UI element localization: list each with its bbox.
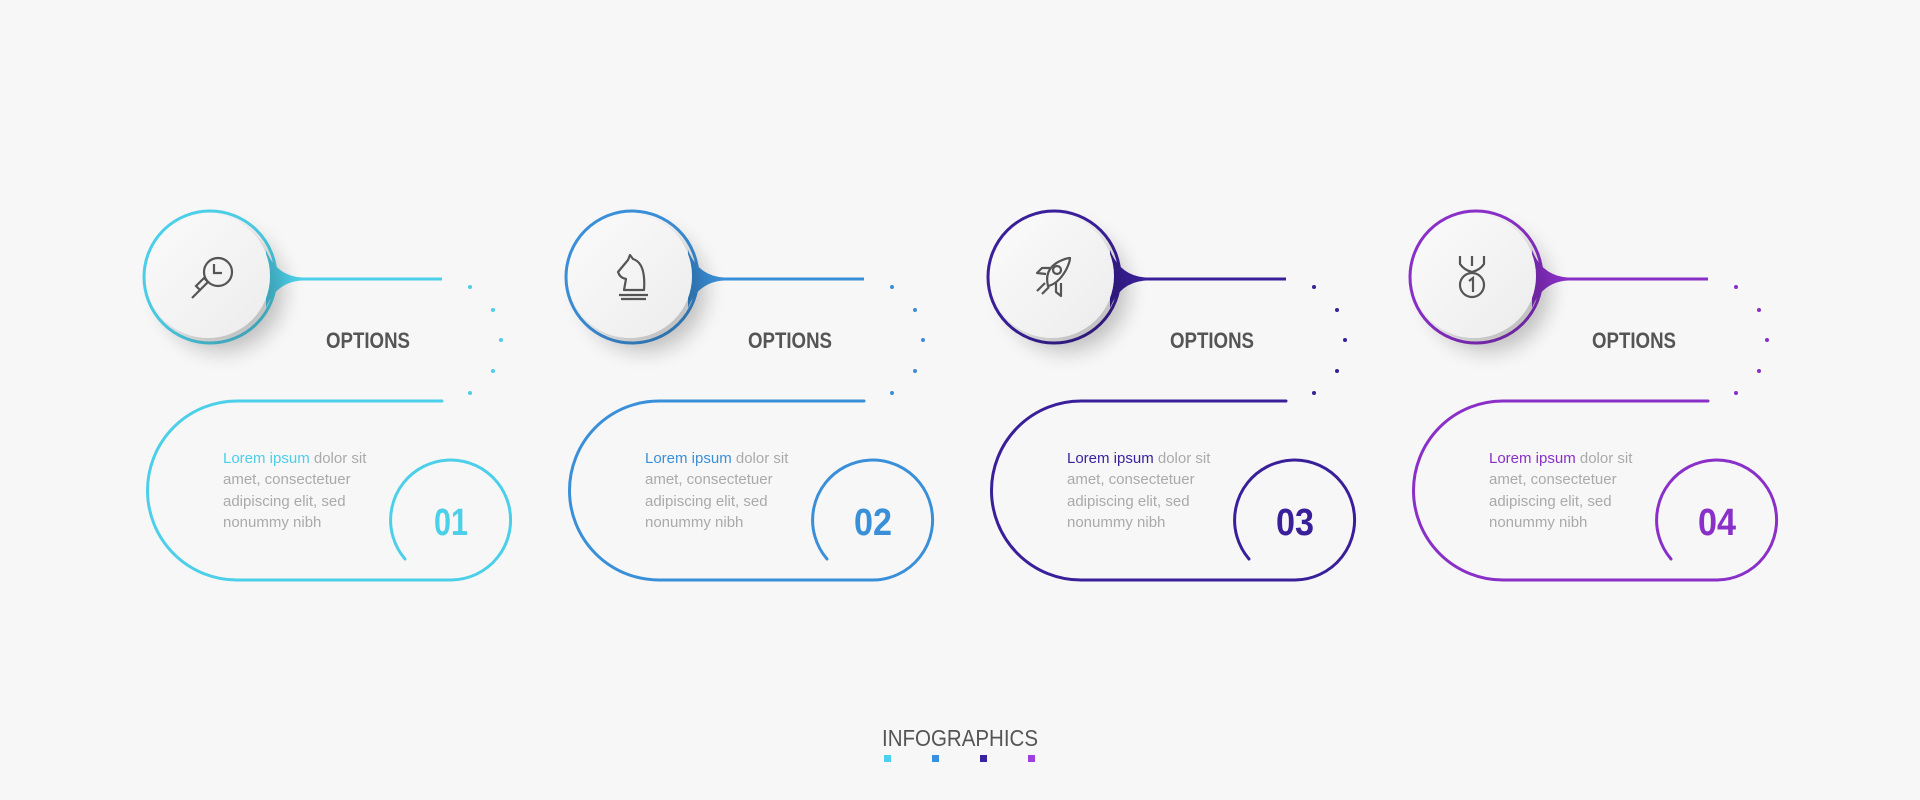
body text: adipiscing elit, sed [1067, 493, 1190, 510]
body text: amet, consectetuer [1489, 471, 1617, 488]
body text: nonummy nibh [645, 514, 743, 531]
number: 02 [854, 502, 892, 544]
body text: Lorem ipsum dolor sit [223, 450, 366, 467]
panel: step 03 [988, 211, 1355, 580]
legend squares [884, 755, 1035, 762]
icon: rocket [1037, 258, 1070, 296]
body text: nonummy nibh [223, 514, 321, 531]
dotted arc [1734, 285, 1769, 395]
icon: medal [1460, 256, 1484, 297]
panel: step 01 [144, 211, 511, 580]
body text: Lorem ipsum dolor sit [1067, 450, 1210, 467]
dotted arc [1312, 285, 1347, 395]
ring with connector [144, 211, 442, 343]
panel: step 02 [566, 211, 933, 580]
body text: Lorem ipsum dolor sit [1489, 450, 1632, 467]
number: 04 [1698, 502, 1736, 544]
body text: amet, consectetuer [1067, 471, 1195, 488]
panel: step 04 [1410, 211, 1777, 580]
footer title: INFOGRAPHICS [882, 725, 1038, 751]
white disc [1412, 214, 1536, 338]
body text: adipiscing elit, sed [645, 493, 768, 510]
heading: OPTIONS [326, 328, 410, 353]
heading: OPTIONS [1170, 328, 1254, 353]
number: 03 [1276, 502, 1314, 544]
capsule outline [570, 401, 933, 580]
body text: Lorem ipsum dolor sit [645, 450, 788, 467]
body text: nonummy nibh [1067, 514, 1165, 531]
icon: magnifier clock [192, 258, 232, 298]
body text: adipiscing elit, sed [223, 493, 346, 510]
number: 01 [434, 502, 468, 544]
dotted arc [890, 285, 925, 395]
white disc [146, 214, 270, 338]
heading: OPTIONS [1592, 328, 1676, 353]
body text: adipiscing elit, sed [1489, 493, 1612, 510]
capsule outline [1414, 401, 1777, 580]
body text: amet, consectetuer [223, 471, 351, 488]
capsule outline [147, 401, 511, 580]
ring with connector [566, 211, 864, 343]
ring with connector [988, 211, 1286, 343]
dotted arc [468, 285, 503, 395]
body text: nonummy nibh [1489, 514, 1587, 531]
white disc [990, 214, 1114, 338]
ring with connector [1410, 211, 1708, 343]
white disc [568, 214, 692, 338]
body text: amet, consectetuer [645, 471, 773, 488]
capsule outline [992, 401, 1355, 580]
icon: chess knight [618, 255, 648, 299]
heading: OPTIONS [748, 328, 832, 353]
